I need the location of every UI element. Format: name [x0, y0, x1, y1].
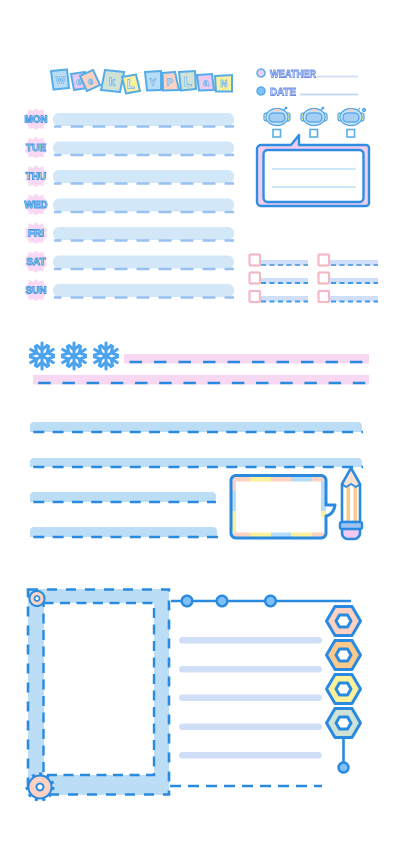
row: Thursday: THU [26, 172, 46, 182]
icon: hex nut orange [326, 640, 360, 670]
title: weekly plan letter tiles: L [127, 76, 135, 92]
date field [257, 86, 358, 98]
panel: photo frame [27, 589, 169, 800]
title: weekly plan letter tiles: Y [150, 78, 157, 88]
weather field: WEATHER [270, 68, 316, 80]
row: Friday: FRI [28, 228, 44, 240]
title: weekly plan letter tiles: P [167, 78, 174, 88]
panel: speech bubble note [257, 135, 369, 206]
title: weekly plan letter tiles [51, 70, 232, 94]
icon: robot mood 2 [301, 107, 327, 126]
panel: days of the week [24, 108, 234, 301]
row: Monday: MON [24, 114, 48, 126]
row: Monday [24, 108, 234, 130]
icon: gear [27, 774, 53, 800]
icon: robot mood 3 [338, 108, 366, 126]
row: Sunday [25, 279, 234, 301]
title: weekly plan letter tiles: k [109, 76, 116, 88]
icon: snowflake 3 [92, 343, 120, 369]
panel: to-do checklist [250, 254, 378, 302]
title: weekly plan letter tiles: N [220, 79, 228, 90]
row: Saturday: SAT [26, 257, 46, 268]
weather field [257, 68, 358, 80]
row: Wednesday: WED [24, 200, 48, 211]
text placeholder bars [179, 637, 322, 758]
bottom dashed rule [170, 785, 322, 787]
title: weekly plan letter tiles: e [88, 76, 94, 88]
icon: hex nut green [326, 708, 360, 738]
mood checkboxes [273, 130, 354, 137]
icon: snowflake 1 [28, 343, 56, 369]
connector with end dot [338, 738, 348, 772]
pink heading strip 1 [124, 354, 369, 364]
title: weekly plan letter tiles: e [76, 77, 82, 88]
title: weekly plan letter tiles: W [56, 76, 66, 86]
row: Tuesday [25, 136, 234, 158]
writing lines: blue strips [29, 422, 363, 537]
pink heading strip 2 [32, 375, 369, 384]
title: weekly plan letter tiles: a [203, 78, 209, 89]
icon: hex nut yellow [326, 674, 360, 704]
row: Friday [25, 222, 234, 244]
timeline rail with dots [171, 596, 351, 606]
row: Sunday: SUN [25, 286, 47, 296]
icon: snowflake 2 [60, 343, 88, 369]
date field: DATE [270, 86, 296, 98]
title: weekly plan letter tiles: L [184, 74, 192, 89]
row: Saturday [25, 250, 234, 272]
row: Thursday [25, 165, 234, 187]
icon: pencil [340, 468, 362, 539]
icon: small ring [30, 591, 44, 606]
icon: hex nut peach [326, 606, 360, 636]
row: Wednesday [24, 194, 234, 216]
row: Tuesday: TUE [26, 143, 46, 154]
icon: robot mood 1 [264, 107, 290, 126]
panel: rainbow speech bubble [231, 476, 335, 538]
